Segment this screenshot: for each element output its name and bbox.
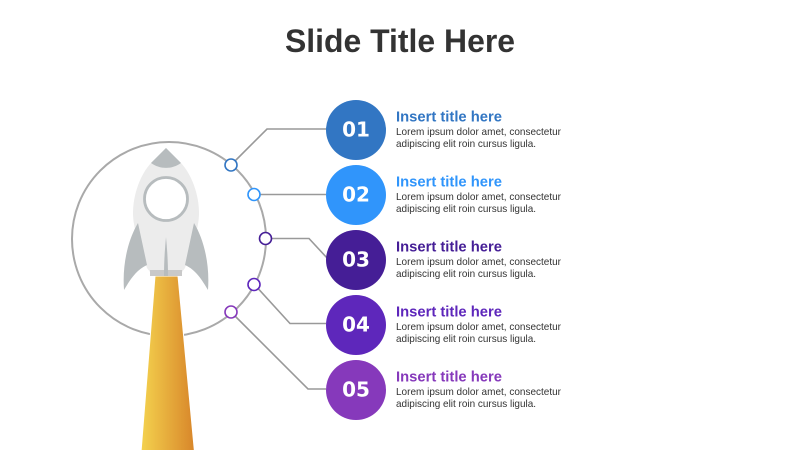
node 01 (225, 159, 237, 171)
center fin (164, 237, 168, 276)
item 05: 05 (342, 378, 370, 402)
node 05 (225, 306, 237, 318)
item 05 (326, 360, 561, 420)
nozzle (150, 270, 182, 276)
item 01: Insert title here (396, 108, 502, 126)
item 02: 02 (342, 182, 370, 206)
item 04: 04 (342, 312, 370, 336)
rocket body (133, 148, 199, 272)
node 04 (248, 278, 260, 290)
item 02 (326, 165, 561, 225)
item 04: Lorem ipsum dolor amet, consectetur (396, 321, 561, 333)
item 02: Lorem ipsum dolor amet, consectetur (396, 191, 561, 203)
item 05: adipiscing elit roin cursus ligula. (396, 398, 536, 410)
item 03: Insert title here (396, 238, 502, 256)
title: Slide Title Here (285, 23, 515, 59)
rocket flame (141, 276, 194, 450)
orbit circle (72, 142, 266, 336)
item 01 (326, 100, 561, 160)
left fin (124, 223, 147, 290)
connector lines (231, 129, 328, 389)
rocket (124, 148, 208, 290)
item 05: Insert title here (396, 368, 502, 386)
item 01: adipiscing elit roin cursus ligula. (396, 138, 536, 150)
item 03: Lorem ipsum dolor amet, consectetur (396, 256, 561, 268)
item 02: adipiscing elit roin cursus ligula. (396, 203, 536, 215)
item 01: 01 (342, 118, 370, 142)
nose cap (151, 148, 181, 168)
item 02: Insert title here (396, 174, 502, 190)
item 03 (326, 230, 561, 290)
item 03: adipiscing elit roin cursus ligula. (396, 268, 536, 280)
item 04: Insert title here (396, 304, 502, 320)
item 03: 03 (342, 248, 370, 272)
item 04: adipiscing elit roin cursus ligula. (396, 333, 536, 345)
window (144, 178, 188, 220)
node 03 (260, 232, 272, 244)
item 01: Lorem ipsum dolor amet, consectetur (396, 126, 561, 138)
item 04 (326, 295, 561, 355)
node 02 (248, 188, 260, 200)
right fin (185, 223, 208, 290)
item 05: Lorem ipsum dolor amet, consectetur (396, 386, 561, 398)
